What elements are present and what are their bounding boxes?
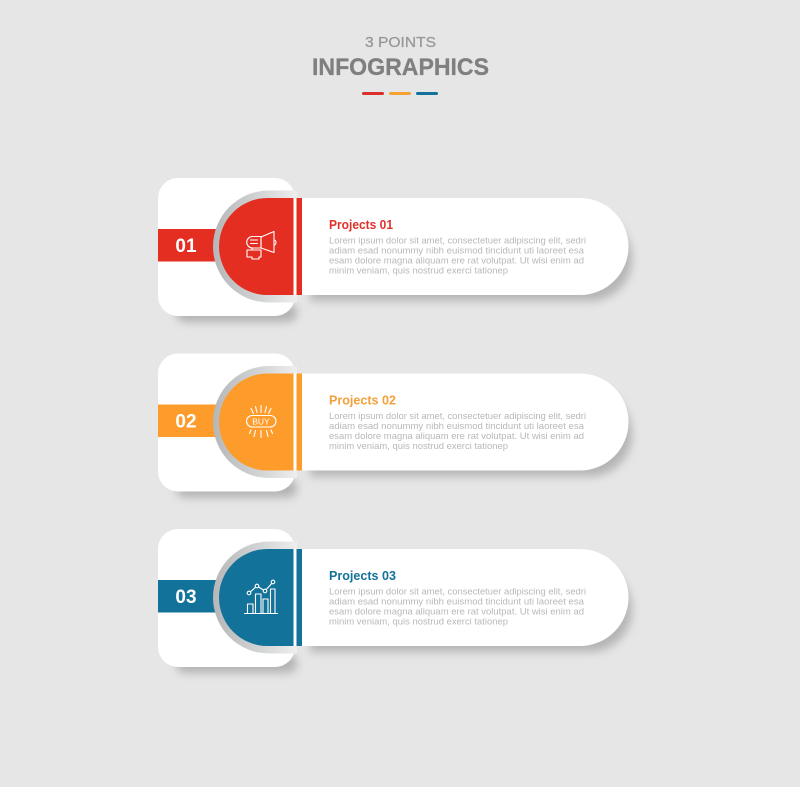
body text: esam dolore magna aliquam ere rat volutpat. Ut wisi enim ad bbox=[329, 431, 584, 442]
heading: Projects 03 bbox=[329, 569, 396, 583]
icon: bar chart with trend line bbox=[244, 580, 278, 614]
panel: step 02 bbox=[158, 354, 632, 498]
pill shadow bbox=[310, 388, 632, 476]
grey ring bbox=[213, 190, 297, 302]
header bbox=[312, 34, 489, 95]
coloured half disc bbox=[219, 549, 294, 646]
gap bbox=[294, 374, 296, 470]
body text bbox=[329, 586, 586, 627]
number card bbox=[158, 529, 295, 667]
text pill bbox=[302, 374, 628, 470]
card shadow bbox=[176, 303, 297, 322]
body text: adiam esad nonummy nibh euismod tincidunt uti laoreet esa bbox=[329, 245, 585, 256]
number: 01 bbox=[175, 236, 197, 257]
icon: buy badge bbox=[246, 406, 276, 438]
number band bbox=[158, 404, 218, 437]
colour strip bbox=[296, 549, 302, 646]
subtitle: 3 POINTS bbox=[365, 34, 436, 51]
number card bbox=[158, 354, 295, 492]
coloured half disc bbox=[219, 374, 294, 470]
title: INFOGRAPHICS bbox=[312, 54, 489, 81]
heading: Projects 02 bbox=[329, 394, 396, 408]
text pill bbox=[302, 549, 628, 646]
body text: minim veniam, quis nostrud exerci tationep bbox=[329, 616, 508, 627]
body text bbox=[329, 235, 586, 276]
number: 03 bbox=[175, 587, 197, 608]
panel: step 01 bbox=[158, 178, 632, 322]
number band bbox=[158, 580, 218, 612]
colour strip bbox=[296, 198, 302, 295]
text pill bbox=[302, 198, 628, 295]
gap bbox=[294, 198, 296, 295]
body text: adiam esad nonummy nibh euismod tincidunt uti laoreet esa bbox=[329, 421, 585, 432]
grey ring bbox=[213, 366, 297, 478]
body text bbox=[329, 411, 586, 452]
pill shadow bbox=[310, 212, 632, 301]
pill shadow bbox=[310, 563, 632, 652]
number card bbox=[158, 178, 295, 316]
panel: step 03 bbox=[158, 529, 632, 673]
coloured half disc bbox=[219, 198, 294, 295]
number band bbox=[158, 229, 218, 262]
icon: buy badge: BUY bbox=[252, 416, 270, 426]
body text: esam dolore magna aliquam ere rat volutpat. Ut wisi enim ad bbox=[329, 606, 584, 617]
heading: Projects 01 bbox=[329, 218, 393, 232]
colour dashes bbox=[362, 92, 438, 95]
colour strip bbox=[296, 374, 302, 470]
card shadow bbox=[176, 654, 297, 673]
body text: adiam esad nonummy nibh euismod tincidunt uti laoreet esa bbox=[329, 596, 585, 607]
body text: minim veniam, quis nostrud exerci tationep bbox=[329, 265, 508, 276]
gap bbox=[294, 549, 296, 646]
body text: Lorem ipsum dolor sit amet, consectetuer adipiscing elit, sedri bbox=[329, 586, 586, 597]
body text: esam dolore magna aliquam ere rat volutpat. Ut wisi enim ad bbox=[329, 255, 584, 266]
number: 02 bbox=[175, 412, 197, 432]
body text: Lorem ipsum dolor sit amet, consectetuer adipiscing elit, sedri bbox=[329, 235, 586, 246]
icon: megaphone bbox=[247, 232, 276, 259]
body text: minim veniam, quis nostrud exerci tationep bbox=[329, 441, 508, 452]
grey ring bbox=[213, 542, 297, 654]
body text: Lorem ipsum dolor sit amet, consectetuer adipiscing elit, sedri bbox=[329, 411, 586, 422]
card shadow bbox=[176, 478, 297, 498]
